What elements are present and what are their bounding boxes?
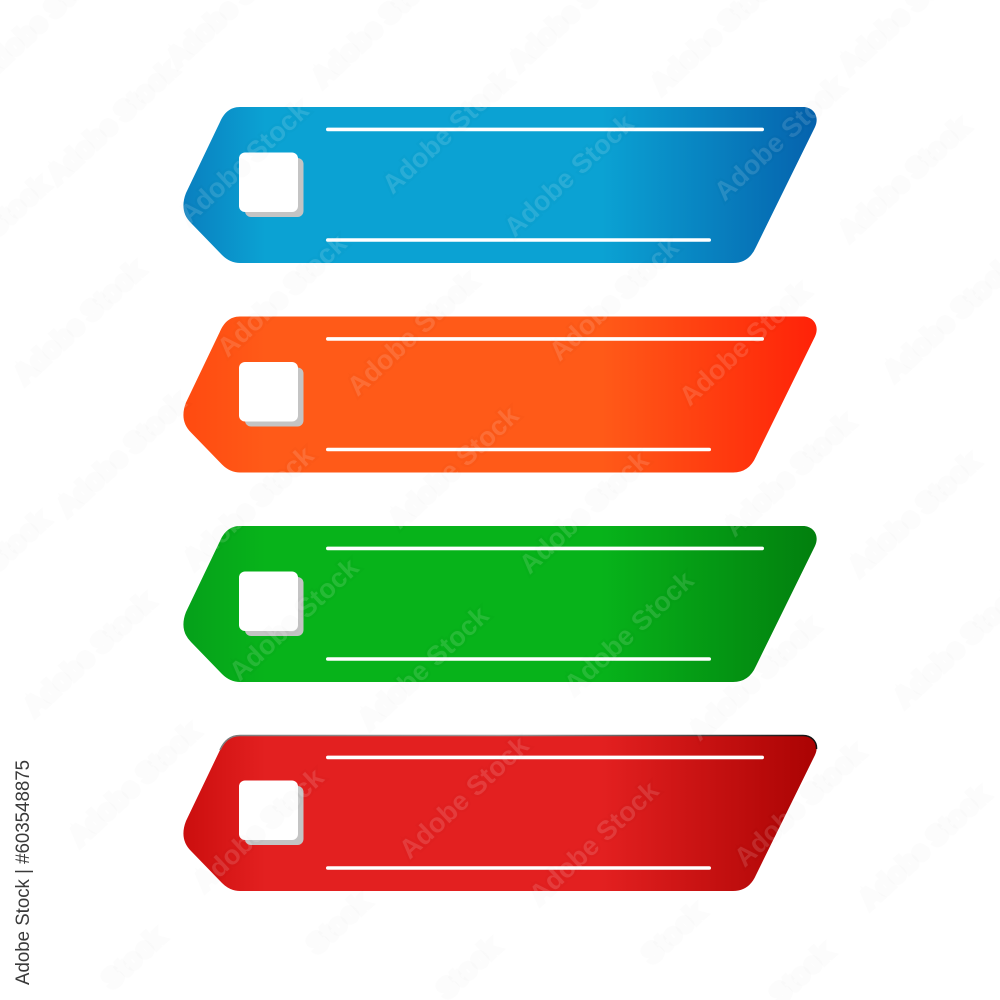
- green icon box: [239, 572, 298, 631]
- watermark pattern: Adobe Stock: [853, 780, 995, 915]
- watermark pattern: Adobe Stock: [211, 228, 353, 363]
- watermark pattern: Stock: [301, 887, 376, 960]
- watermark pattern: Adobe Stock: [558, 565, 700, 700]
- watermark pattern: Adobe Stock: [383, 400, 525, 535]
- watermark pattern: Adobe Stock: [513, 445, 655, 580]
- red icon box: [239, 780, 298, 840]
- banner: orange: [183, 316, 817, 472]
- watermark pattern: Adobe Stock: [833, 112, 975, 247]
- watermark pattern: Adobe Stock: [718, 408, 860, 543]
- red top line: [326, 756, 764, 759]
- orange icon box shadow: [245, 368, 304, 426]
- watermark pattern: Adobe Stock: [18, 587, 160, 722]
- watermark pattern: Adobe Stock: [728, 738, 870, 873]
- orange top line: [326, 337, 764, 341]
- blue icon box: [239, 152, 298, 212]
- stock image id: Adobe Stock | #603548875: [13, 760, 34, 985]
- watermark pattern: Adobe Stock: [173, 95, 315, 230]
- watermark pattern: Adobe Stock: [376, 65, 518, 200]
- red bottom line: [326, 866, 711, 870]
- orange icon box: [239, 362, 298, 422]
- watermark pattern: Adobe Stock: [63, 717, 205, 852]
- watermark pattern: Adobe Stock: [353, 600, 495, 735]
- watermark pattern: Adobe Stock: [843, 447, 985, 582]
- blue icon box shadow: [245, 158, 304, 217]
- blue top line: [326, 128, 764, 131]
- watermark pattern: Adobe Stock: [178, 440, 320, 575]
- watermark pattern: Adobe Stock: [498, 108, 640, 243]
- watermark pattern: Adobe Stock: [41, 55, 183, 190]
- watermark pattern: Adobe Stock: [543, 232, 685, 367]
- watermark pattern: Adobe Stock: [223, 552, 365, 687]
- watermark pattern: Stock: [96, 922, 171, 995]
- watermark pattern: Adobe Stock: [393, 730, 535, 865]
- blue bottom line: [326, 238, 711, 242]
- green top line: [326, 547, 764, 550]
- banner: green: [183, 526, 817, 682]
- orange bottom line: [326, 448, 711, 451]
- watermark pattern: Adobe Stock: [673, 277, 815, 412]
- green bottom line: [326, 657, 711, 661]
- red icon box shadow: [245, 786, 304, 845]
- watermark pattern: Adobe Stock: [523, 775, 665, 910]
- watermark pattern: Adobe Stock: [8, 255, 150, 390]
- banner: blue: [183, 107, 817, 263]
- watermark pattern: Adobe Stock: [708, 72, 850, 207]
- green icon box shadow: [245, 577, 304, 636]
- watermark pattern: Adobe Stock: [188, 762, 330, 897]
- red top edge highlight: [220, 736, 817, 750]
- banner: red: [183, 735, 817, 891]
- watermark pattern: Stock: [636, 897, 711, 970]
- watermark pattern: Adobe Stock: [683, 612, 825, 747]
- watermark pattern: Adobe Stock: [341, 267, 483, 402]
- watermark pattern: Adobe Stock: [51, 387, 193, 522]
